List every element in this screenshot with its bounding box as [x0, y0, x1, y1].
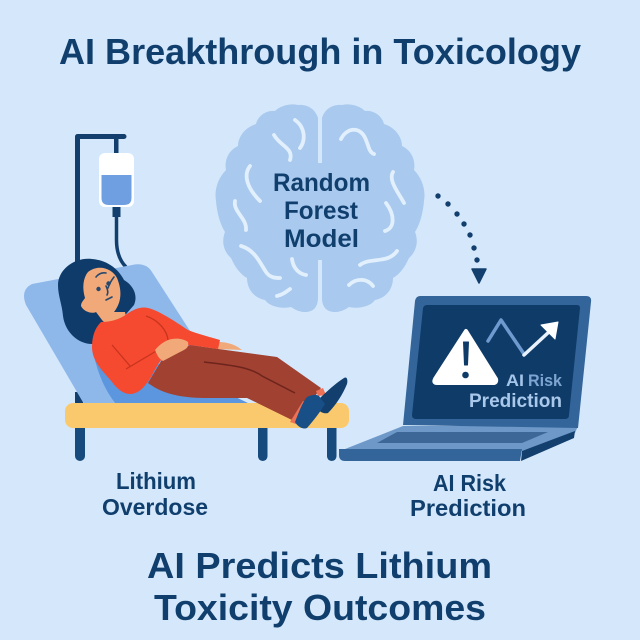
screen label: AI	[506, 371, 524, 390]
icon: laptop with AI risk prediction	[339, 296, 591, 461]
trend line	[488, 320, 558, 355]
label: AI risk prediction: AI Risk	[433, 470, 506, 496]
brain label: Random	[273, 169, 370, 197]
label: lithium overdose	[102, 468, 208, 520]
hair	[58, 259, 136, 344]
shirt	[92, 307, 220, 394]
warning triangle	[434, 331, 496, 383]
label: AI risk prediction: Prediction	[410, 495, 526, 521]
icon: dotted arrow from brain to laptop	[435, 193, 486, 283]
pants	[148, 345, 321, 422]
label: lithium overdose: Overdose	[102, 494, 208, 520]
screen label	[469, 371, 563, 412]
brain label	[273, 169, 370, 253]
laptop base	[339, 426, 578, 461]
cuffs	[290, 401, 308, 424]
hand on belly	[155, 339, 188, 361]
bed	[24, 264, 349, 461]
bottom headline: AI Predicts Lithium	[147, 545, 492, 586]
label: AI risk prediction	[410, 470, 526, 521]
brain label: Model	[284, 225, 359, 253]
screen label: Prediction	[469, 390, 562, 412]
feet	[318, 377, 347, 413]
laptop screen	[403, 296, 591, 428]
icon: IV drip stand and bag	[78, 136, 134, 285]
bottom headline: Toxicity Outcomes	[154, 587, 486, 628]
far hand	[218, 342, 242, 350]
patient lying on bed	[58, 259, 347, 429]
title: AI Breakthrough in Toxicology	[59, 31, 581, 72]
bottom headline	[147, 545, 492, 628]
screen label: Risk	[528, 371, 563, 390]
face	[81, 268, 127, 324]
label: lithium overdose: Lithium	[116, 468, 196, 494]
icon: brain with model label	[215, 104, 425, 312]
brain label: Forest	[284, 197, 359, 225]
